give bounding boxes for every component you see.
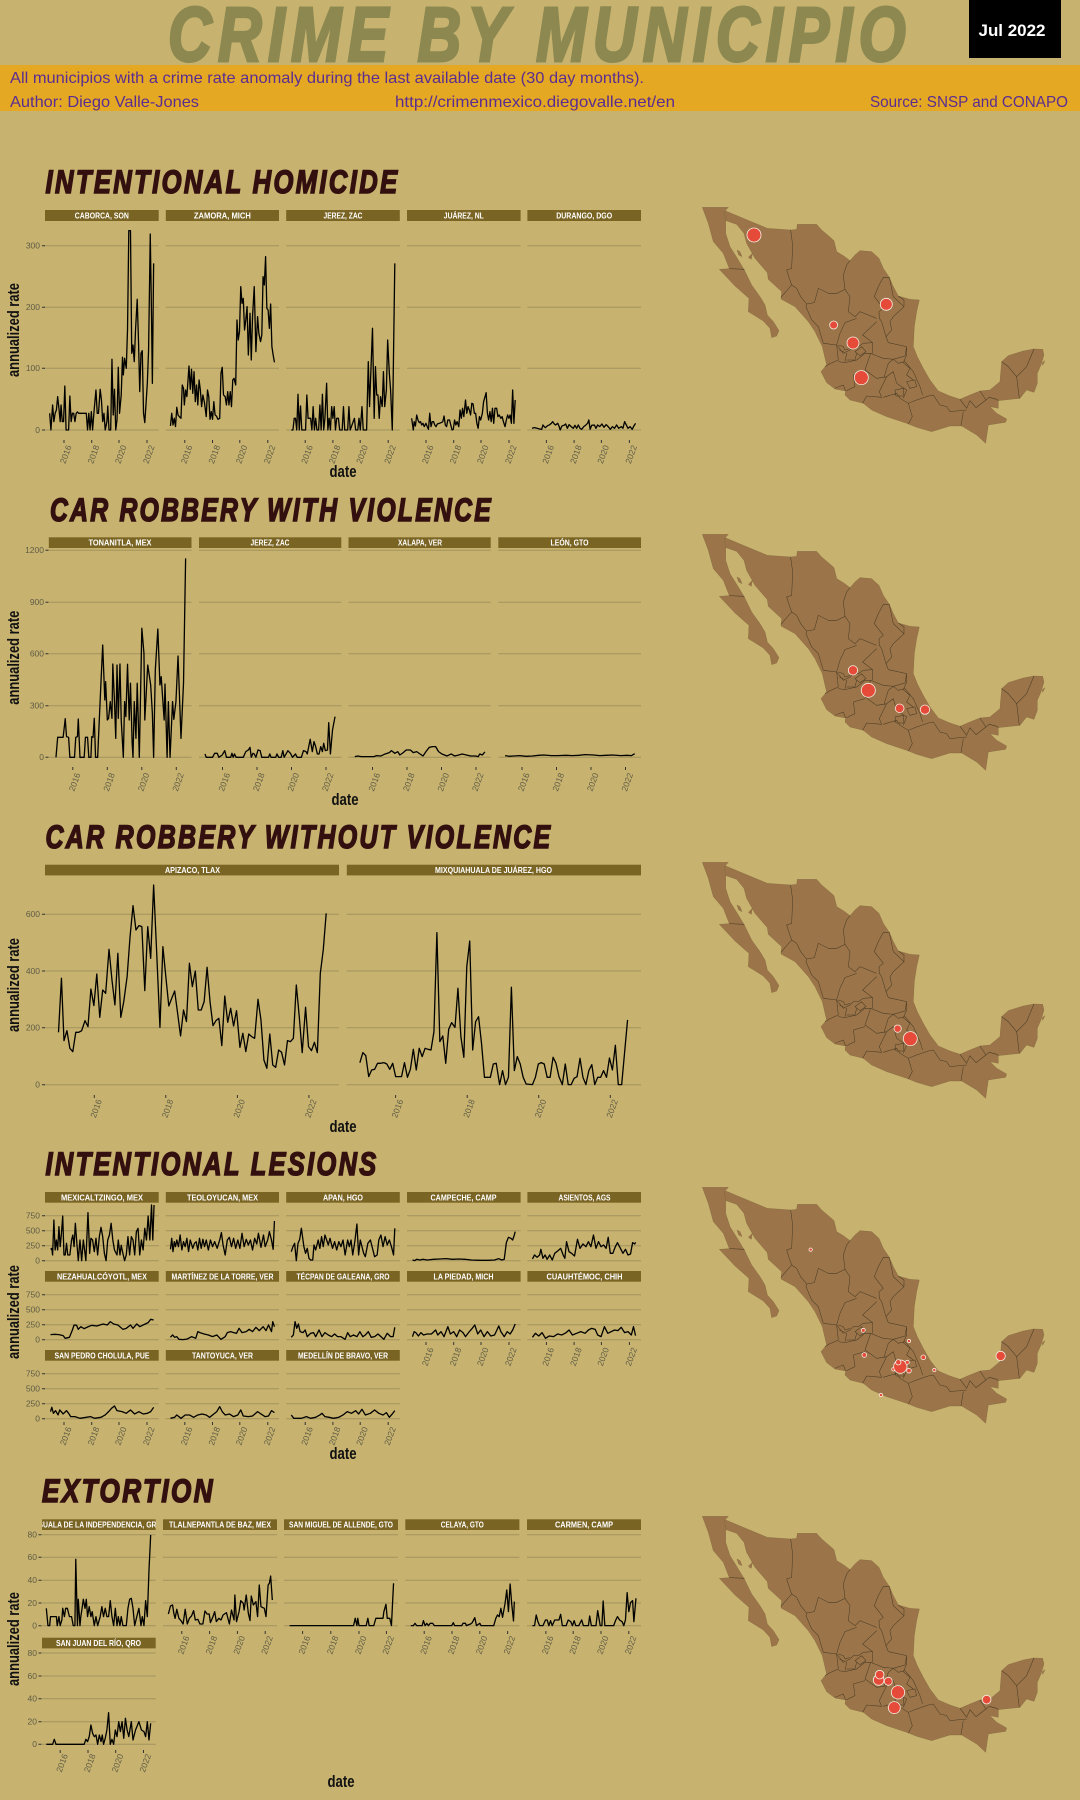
y axis: 1200: [25, 545, 44, 555]
x axis: 2016: [540, 443, 556, 465]
strip: LEÓN, GTO: [550, 537, 589, 548]
panel: Medellín de Bravo, VER: [286, 1350, 400, 1447]
x axis: 2018: [568, 1346, 584, 1367]
strip: [407, 210, 521, 221]
panel: San Pedro Cholula, PUE: [45, 1350, 159, 1447]
panel: León, GTO: [498, 537, 641, 793]
x axis: 2022: [382, 1425, 398, 1447]
subtitle band: [0, 65, 1080, 111]
x axis: 2020: [474, 1634, 490, 1656]
x axis: 2018: [461, 1098, 477, 1119]
x axis: 2016: [179, 443, 195, 465]
panel: Tlalnepantla de Baz, MEX: [163, 1519, 277, 1656]
y axis: 900: [30, 597, 44, 607]
strip: JEREZ, ZAC: [250, 538, 290, 548]
panel: Mexicaltzingo, MEX: [45, 1192, 159, 1261]
x axis: 2018: [160, 1098, 176, 1119]
x axis: 2020: [435, 771, 451, 793]
y axis: row 2: [26, 1290, 45, 1344]
line chart: [532, 1235, 636, 1260]
panel: Caborca, SON: [45, 210, 159, 465]
line chart: [291, 263, 395, 430]
y axis title: annualized rate: [4, 1592, 23, 1686]
panel: Jerez, ZAC: [286, 210, 400, 465]
x axis: 2022: [259, 1634, 275, 1656]
x axis: 2020: [595, 443, 611, 465]
x axis: 2018: [101, 771, 117, 793]
y axis: [26, 240, 45, 435]
line chart: [291, 1409, 395, 1418]
y axis: row 1: 250: [26, 1240, 40, 1250]
map: extortion: [702, 1516, 1045, 1752]
strip: [498, 537, 641, 548]
line chart: [411, 1584, 514, 1626]
x axis title: date: [330, 1117, 356, 1136]
x axis: 2020: [136, 771, 152, 793]
x axis: 2022: [141, 443, 157, 465]
y axis: row 3: 750: [26, 1368, 40, 1378]
section: car robbery without violence: [4, 819, 1045, 1136]
line chart: [46, 1535, 151, 1626]
strip: JUÁREZ, NL: [444, 210, 484, 220]
strip: IGUALA DE LA INDEPENDENCIA, GRO: [36, 1520, 162, 1530]
x axis: 2020: [475, 1346, 491, 1367]
panel: Teoloyucan, MEX: [166, 1192, 279, 1261]
panel: Durango, DGO: [527, 210, 641, 465]
strip: CARMEN, CAMP: [555, 1520, 613, 1530]
x axis: [296, 1631, 396, 1656]
x axis: 2016: [67, 771, 83, 793]
x axis: [516, 767, 635, 793]
strip: TANTOYUCA, VER: [192, 1350, 253, 1360]
x axis: [67, 767, 186, 793]
x axis: 2020: [234, 443, 250, 465]
line chart: [168, 1576, 272, 1624]
strip: [166, 210, 279, 221]
strip: SAN MIGUEL DE ALLENDE, GTO: [289, 1520, 393, 1530]
line chart: [170, 257, 274, 427]
x axis: 2022: [262, 1425, 278, 1447]
panel: Apizaco, TLAX: [45, 865, 339, 1119]
x axis: 2022: [623, 1634, 639, 1656]
x axis: 2018: [82, 1752, 98, 1774]
x axis: 2022: [503, 1346, 519, 1367]
x axis: [58, 1422, 157, 1447]
panel: Técpan de Galeana, GRO: [286, 1271, 400, 1340]
line chart: [46, 1713, 151, 1744]
x axis title: date: [328, 1772, 354, 1791]
strip: TEOLOYUCAN, MEX: [187, 1192, 258, 1202]
line chart: [532, 420, 636, 430]
x axis: 2018: [251, 771, 267, 793]
x axis: 2022: [623, 443, 639, 465]
strip: [347, 865, 641, 875]
line chart: [291, 1224, 395, 1261]
strip: CUAUHTÉMOC, CHIH: [546, 1271, 623, 1281]
x axis: [420, 440, 519, 465]
x axis: 2020: [353, 1634, 369, 1656]
x axis: [389, 1095, 620, 1119]
line chart: [532, 1327, 636, 1338]
panel: Tantoyuca, VER: [166, 1350, 279, 1447]
strip: JEREZ, ZAC: [324, 210, 363, 220]
strip: MEDELLÍN DE BRAVO, VER: [298, 1350, 388, 1360]
x axis: 2022: [604, 1098, 620, 1119]
panel: Juárez, NL: [407, 210, 521, 465]
y axis: 300: [30, 700, 44, 710]
map: intentional lesions: [702, 1187, 1045, 1423]
x axis: 2018: [327, 1425, 343, 1447]
panel: La Piedad, MICH: [407, 1271, 521, 1367]
x axis: 2016: [540, 1634, 556, 1656]
strip: ASIENTOS, AGS: [558, 1192, 611, 1202]
x axis: 2020: [595, 1634, 611, 1656]
line chart: [532, 1593, 636, 1626]
section: car robbery with violence: [4, 492, 1045, 809]
panel: Cuauhtémoc, CHIH: [527, 1271, 641, 1367]
x axis: 2018: [446, 1634, 462, 1656]
x axis: 2022: [137, 1752, 153, 1774]
panel: Xalapa, VER: [348, 537, 491, 793]
panel: Zamora, MICH: [166, 210, 279, 465]
x axis: [540, 440, 639, 465]
map: car robbery without violence: [702, 862, 1045, 1098]
x axis: 2018: [203, 1634, 219, 1656]
section: extortion: [4, 1473, 1045, 1791]
y axis: row 2: 500: [26, 1304, 40, 1314]
y axis: 600: [26, 909, 40, 919]
y axis: row 2: 0: [35, 1334, 40, 1344]
x axis: 2018: [447, 1346, 463, 1367]
strip: MEXICALTZINGO, MEX: [61, 1192, 143, 1202]
x axis: 2020: [285, 771, 301, 793]
x axis: 2016: [299, 443, 315, 465]
map: car robbery with violence: [702, 534, 1045, 770]
panel: Mixquiahuala de Juárez, HGO: [347, 865, 641, 1119]
x axis: [540, 1631, 639, 1656]
x axis: 2016: [58, 443, 74, 465]
x axis: [420, 1342, 519, 1367]
x axis: 2016: [418, 1634, 434, 1656]
strip: TONANITLA, MEX: [88, 538, 152, 548]
heading: car robbery without violence: CAR ROBBERY WITHOUT VIOLENCE: [46, 819, 552, 855]
x axis: 2018: [206, 443, 222, 465]
strip: CABORCA, SON: [75, 210, 129, 220]
panel: San Juan del Río, QRO: [42, 1638, 156, 1774]
y axis: row 2: 40: [28, 1694, 37, 1704]
y axis: row 2: 60: [28, 1671, 37, 1681]
y axis: 200: [26, 1022, 40, 1032]
y axis: 100: [26, 363, 40, 373]
y axis: row 2: 750: [26, 1290, 40, 1300]
x axis: 2016: [420, 443, 436, 465]
y axis: 200: [26, 302, 40, 312]
x axis: 2016: [176, 1634, 192, 1656]
strip: [286, 210, 400, 221]
y axis: [26, 909, 45, 1090]
strip: [527, 210, 641, 221]
panel: Iguala de la Independencia, GRO: [36, 1519, 162, 1626]
y axis: row 1: 60: [28, 1552, 37, 1562]
strip: APAN, HGO: [323, 1192, 363, 1202]
x axis: [366, 767, 486, 793]
x axis: 2018: [550, 771, 566, 793]
x axis title: date: [332, 790, 358, 809]
y axis: row 3: 500: [26, 1384, 40, 1394]
y axis: 0: [39, 752, 44, 762]
x axis: [54, 1750, 153, 1774]
y axis: row 1: [28, 1530, 42, 1630]
x axis: 2020: [113, 1425, 129, 1447]
x axis: 2018: [206, 1425, 222, 1447]
x axis: 2020: [231, 1098, 247, 1119]
line chart: [205, 717, 335, 757]
y axis: row 2: 80: [28, 1648, 37, 1658]
panel: Jerez, ZAC: [199, 537, 341, 793]
panel: Tonanitla, MEX: [49, 537, 191, 793]
y axis title: annualized rate: [4, 283, 23, 377]
y axis: row 1: 20: [28, 1598, 37, 1608]
x axis: 2018: [567, 1634, 583, 1656]
x axis: 2022: [303, 1098, 319, 1119]
x axis: 2016: [179, 1425, 195, 1447]
strip: [49, 537, 191, 548]
x axis: [540, 1342, 639, 1367]
line chart: [51, 1319, 154, 1338]
x axis: [299, 440, 398, 465]
line chart: [412, 390, 515, 430]
x axis: 2016: [296, 1634, 312, 1656]
panel: Celaya, GTO: [405, 1519, 519, 1656]
date badge: [969, 0, 1061, 58]
x axis: 2020: [475, 443, 491, 465]
x axis: 2020: [354, 443, 370, 465]
line chart: [505, 754, 635, 756]
strip: MIXQUIAHUALA DE JUÁREZ, HGO: [435, 865, 552, 875]
x axis: 2022: [170, 771, 186, 793]
y axis: row 1: 0: [35, 1256, 40, 1266]
x axis: [418, 1631, 517, 1656]
x axis: [58, 440, 157, 465]
x axis: 2018: [327, 443, 343, 465]
line chart: [170, 1407, 274, 1418]
line chart: [170, 1221, 274, 1255]
panel: San Miguel de Allende, GTO: [284, 1519, 398, 1656]
strip: XALAPA, VER: [398, 538, 442, 548]
x axis: 2018: [325, 1634, 341, 1656]
x axis: 2020: [354, 1425, 370, 1447]
y axis: row 2: [28, 1648, 42, 1749]
x axis: 2018: [401, 771, 417, 793]
y axis: row 2: 0: [32, 1739, 37, 1749]
x axis: [179, 440, 278, 465]
x axis: 2022: [503, 443, 519, 465]
y axis: [25, 545, 48, 762]
y axis: 400: [26, 966, 40, 976]
line chart: [290, 1583, 394, 1626]
y axis: row 3: [26, 1368, 45, 1424]
y axis: row 1: 750: [26, 1210, 40, 1220]
x axis title: date: [330, 462, 356, 481]
y axis: 0: [35, 425, 40, 435]
strip: DURANGO, DGO: [556, 210, 613, 220]
strip: TÉCPAN DE GALEANA, GRO: [296, 1271, 390, 1281]
x axis: 2022: [623, 1346, 639, 1367]
panel: Carmen, CAMP: [527, 1519, 641, 1656]
x axis: 2020: [234, 1425, 250, 1447]
strip: SAN PEDRO CHOLULA, PUE: [54, 1350, 150, 1360]
y axis: row 1: [26, 1210, 45, 1266]
panel: Asientos, AGS: [527, 1192, 641, 1261]
y axis: row 1: 500: [26, 1226, 40, 1236]
x axis: 2016: [299, 1425, 315, 1447]
x axis: 2022: [470, 771, 486, 793]
y axis: 300: [26, 240, 40, 250]
x axis: [88, 1095, 319, 1119]
y axis: row 3: 0: [35, 1414, 40, 1424]
x axis: 2018: [447, 443, 463, 465]
x axis: 2016: [366, 771, 382, 793]
subtitle band: Author: Diego Valle-Jones: [10, 94, 199, 111]
x axis: 2022: [501, 1634, 517, 1656]
y axis: row 2: 20: [28, 1716, 37, 1726]
x axis: 2022: [619, 771, 635, 793]
strip: MARTÍNEZ DE LA TORRE, VER: [172, 1271, 274, 1281]
x axis: [299, 1422, 398, 1447]
heading: intentional homicide: INTENTIONAL HOMICIDE: [46, 164, 400, 200]
strip: SAN JUAN DEL RÍO, QRO: [56, 1638, 141, 1648]
x axis: 2016: [389, 1098, 405, 1119]
x axis: 2020: [532, 1098, 548, 1119]
strip: NEZAHUALCÓYOTL, MEX: [57, 1270, 147, 1281]
strip: APIZACO, TLAX: [165, 865, 220, 875]
x axis: 2020: [585, 771, 601, 793]
line chart: [56, 558, 186, 757]
y axis: row 1: 80: [28, 1530, 37, 1540]
x axis: 2020: [595, 1346, 611, 1367]
x axis: 2016: [54, 1752, 70, 1774]
y axis: row 2: 250: [26, 1320, 40, 1330]
x axis: 2018: [568, 443, 584, 465]
x axis: 2016: [540, 1346, 556, 1367]
line chart: [412, 1324, 515, 1337]
x axis: 2016: [216, 771, 232, 793]
strip: [45, 210, 159, 221]
section: intentional lesions: [4, 1146, 1045, 1463]
x axis: [176, 1631, 275, 1656]
x axis: 2020: [109, 1752, 125, 1774]
line chart: [355, 747, 485, 757]
x axis: 2016: [58, 1425, 74, 1447]
subtitle band: All municipios with a crime rate anomaly during the last available date (30 day months).: [10, 70, 644, 87]
y axis: 600: [30, 648, 44, 658]
x axis: [216, 767, 336, 793]
x axis: 2022: [262, 443, 278, 465]
panel: Martínez de la Torre, VER: [166, 1271, 279, 1340]
line chart: [50, 231, 154, 430]
panel: Campeche, CAMP: [407, 1192, 521, 1261]
map: intentional homicide: [702, 207, 1045, 443]
x axis: 2016: [516, 771, 532, 793]
y axis: 0: [35, 1080, 40, 1090]
x axis: 2022: [141, 1425, 157, 1447]
strip: [45, 865, 339, 875]
x axis: 2022: [382, 443, 398, 465]
x axis: 2016: [420, 1346, 436, 1367]
panel: Nezahualcóyotl, MEX: [45, 1270, 159, 1340]
x axis: 2020: [113, 443, 129, 465]
x axis: 2018: [85, 443, 101, 465]
x axis: 2018: [85, 1425, 101, 1447]
strip: [199, 537, 341, 548]
x axis: [179, 1422, 278, 1447]
line chart: [51, 1205, 154, 1261]
y axis title: annualized rate: [4, 1265, 23, 1359]
panel: Apan, HGO: [286, 1192, 400, 1261]
section: intentional homicide: [4, 164, 1045, 481]
x axis: 2020: [231, 1634, 247, 1656]
subtitle band: Source: SNSP and CONAPO: [870, 94, 1068, 111]
x axis: 2016: [88, 1098, 104, 1119]
line chart: [59, 885, 326, 1068]
line chart: [51, 1406, 154, 1418]
strip: ZAMORA, MICH: [194, 210, 251, 220]
line chart: [170, 1322, 274, 1340]
strip: LA PIEDAD, MICH: [434, 1271, 494, 1281]
strip: CAMPECHE, CAMP: [430, 1192, 497, 1202]
y axis title: annualized rate: [4, 611, 23, 705]
x axis: 2022: [380, 1634, 396, 1656]
heading: extortion: EXTORTION: [42, 1473, 215, 1509]
line chart: [412, 1232, 515, 1261]
y axis title: annualized rate: [4, 938, 23, 1032]
strip: TLALNEPANTLA DE BAZ, MEX: [169, 1520, 271, 1530]
y axis: row 3: 250: [26, 1398, 40, 1408]
heading: intentional lesions: INTENTIONAL LESIONS: [46, 1146, 378, 1182]
line chart: [291, 1322, 395, 1339]
subtitle band: http://crimenmexico.diegovalle.net/en: [395, 94, 675, 111]
line chart: [360, 933, 628, 1085]
strip: [348, 537, 491, 548]
x axis title: date: [330, 1444, 356, 1463]
strip: CELAYA, GTO: [441, 1520, 484, 1530]
x axis: 2022: [320, 771, 336, 793]
y axis: row 1: 40: [28, 1575, 37, 1585]
date badge: Jul 2022: [978, 21, 1046, 40]
y axis: row 1: 0: [32, 1620, 37, 1630]
heading: car robbery with violence: CAR ROBBERY WITH VIOLENCE: [50, 492, 493, 528]
